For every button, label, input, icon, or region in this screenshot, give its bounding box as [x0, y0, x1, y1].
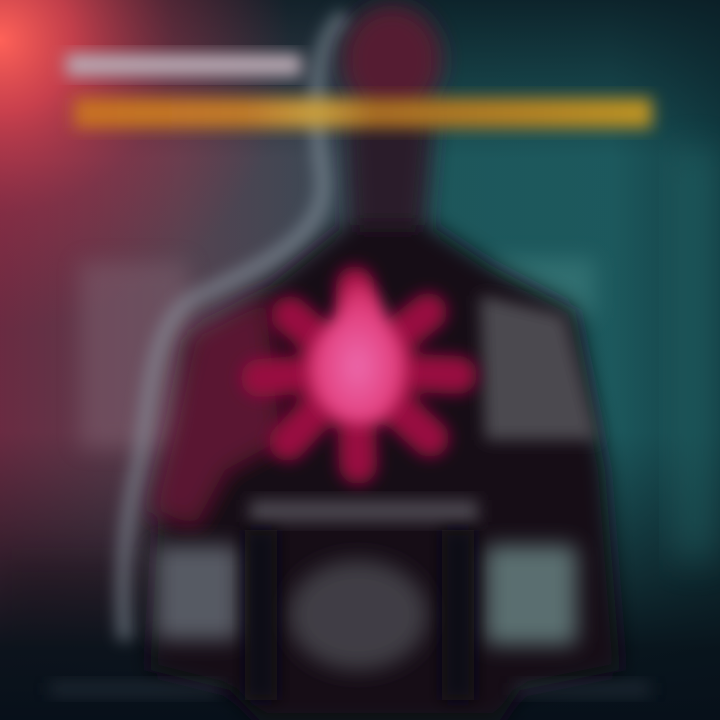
- panel: faint right text block: [490, 258, 595, 318]
- heart core: [308, 280, 407, 424]
- gap between torso and arms, right: [442, 530, 474, 700]
- body silhouette: [150, 5, 620, 720]
- right shoulder grey panel: [480, 295, 598, 440]
- label bar under heart: [250, 500, 478, 522]
- connector line: [123, 15, 345, 640]
- icon: heart with rays: [260, 280, 458, 465]
- heart rays: [260, 285, 458, 465]
- title line 2: [74, 98, 652, 128]
- footer right: [515, 682, 650, 696]
- title line 1: [66, 54, 302, 76]
- panel: lower left: [155, 545, 240, 640]
- panel: lower centre: [288, 560, 428, 670]
- gap between torso and arms, left: [245, 530, 277, 700]
- panel: lower right: [485, 545, 577, 645]
- footer left: [50, 682, 220, 696]
- panel: faint left text block: [80, 262, 188, 448]
